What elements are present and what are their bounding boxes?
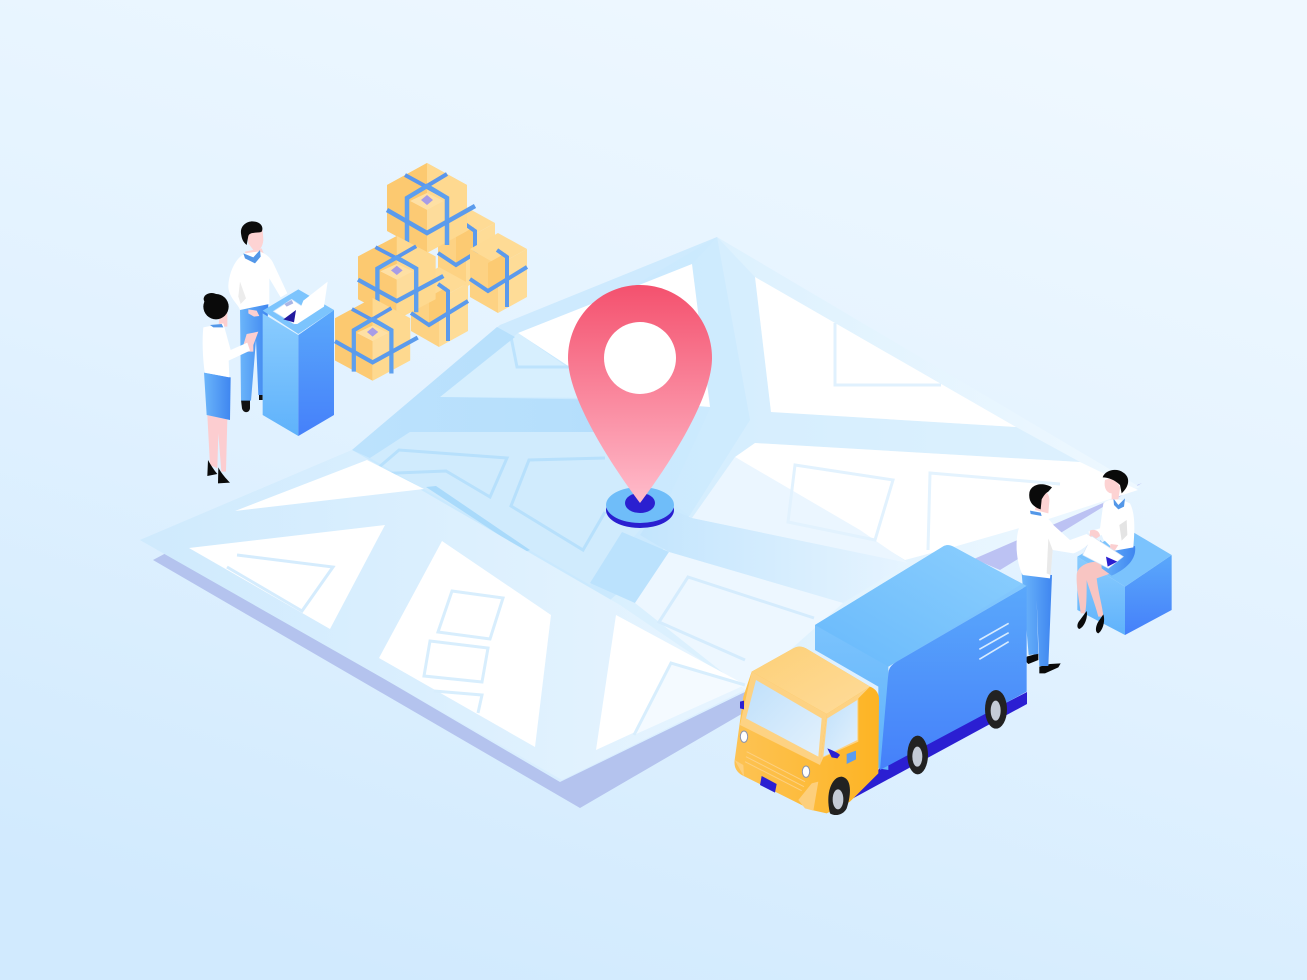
- kiosk: [263, 282, 334, 436]
- rear wheels: [907, 690, 1007, 774]
- grille: [745, 752, 805, 791]
- door handle: [847, 751, 856, 764]
- cab body: [734, 647, 879, 813]
- big parcel middle: [358, 236, 443, 320]
- small parcel middle: [411, 267, 468, 347]
- hands: [1089, 530, 1118, 552]
- mid blocks: [370, 432, 648, 585]
- skirt: [1100, 540, 1135, 576]
- parcel stack: [335, 163, 527, 381]
- big parcel front: [335, 298, 418, 381]
- cargo vents: [979, 623, 1009, 659]
- windshield: [746, 680, 822, 757]
- white city block behind pin: [518, 264, 710, 407]
- side frame and window: [820, 687, 870, 765]
- white city block top right: [755, 277, 1016, 427]
- pin base: [606, 487, 674, 528]
- map shadow: [153, 483, 1142, 808]
- small parcel right: [470, 233, 527, 313]
- white block right: [735, 443, 1138, 560]
- pale block lower right: [635, 552, 843, 690]
- lower front lip: [735, 760, 818, 811]
- lower map section: [140, 450, 745, 780]
- headlights: [740, 731, 748, 742]
- truck cab: [734, 647, 879, 813]
- man at kiosk: [228, 221, 287, 412]
- seat block: [1077, 528, 1172, 635]
- front wheel: [828, 777, 850, 815]
- blouse: [1088, 499, 1134, 551]
- tablet on lap: [1083, 536, 1123, 568]
- big parcel top: [387, 163, 475, 253]
- pin marker: [568, 285, 712, 503]
- side mirrors: [740, 701, 840, 758]
- delivery truck: [734, 545, 1027, 815]
- road from pin: [590, 532, 669, 603]
- main roads: [352, 327, 620, 458]
- upper map section: [352, 237, 1138, 690]
- laptop on kiosk: [273, 282, 328, 324]
- small parcel back top: [438, 207, 495, 287]
- cargo box: [815, 545, 1027, 770]
- shoes: [1077, 611, 1104, 633]
- white block lower right: [596, 615, 742, 750]
- truck chassis: [850, 692, 1027, 800]
- map: [140, 237, 1142, 808]
- seated woman: [1077, 470, 1135, 633]
- head: [1105, 479, 1120, 499]
- roof: [752, 647, 870, 714]
- location pin: [568, 285, 712, 528]
- legs: [1077, 562, 1111, 617]
- map sheet: [140, 237, 1140, 780]
- front upper frame: [740, 672, 827, 765]
- pin hole: [604, 322, 676, 394]
- scene: staff at kiosk, coordinates in zoom space: [203, 221, 334, 483]
- woman at kiosk: [203, 293, 258, 483]
- license plate: [760, 776, 777, 793]
- white block lower left: [189, 525, 385, 629]
- white block lower centre: [379, 541, 551, 747]
- standing man by truck: [1017, 484, 1093, 673]
